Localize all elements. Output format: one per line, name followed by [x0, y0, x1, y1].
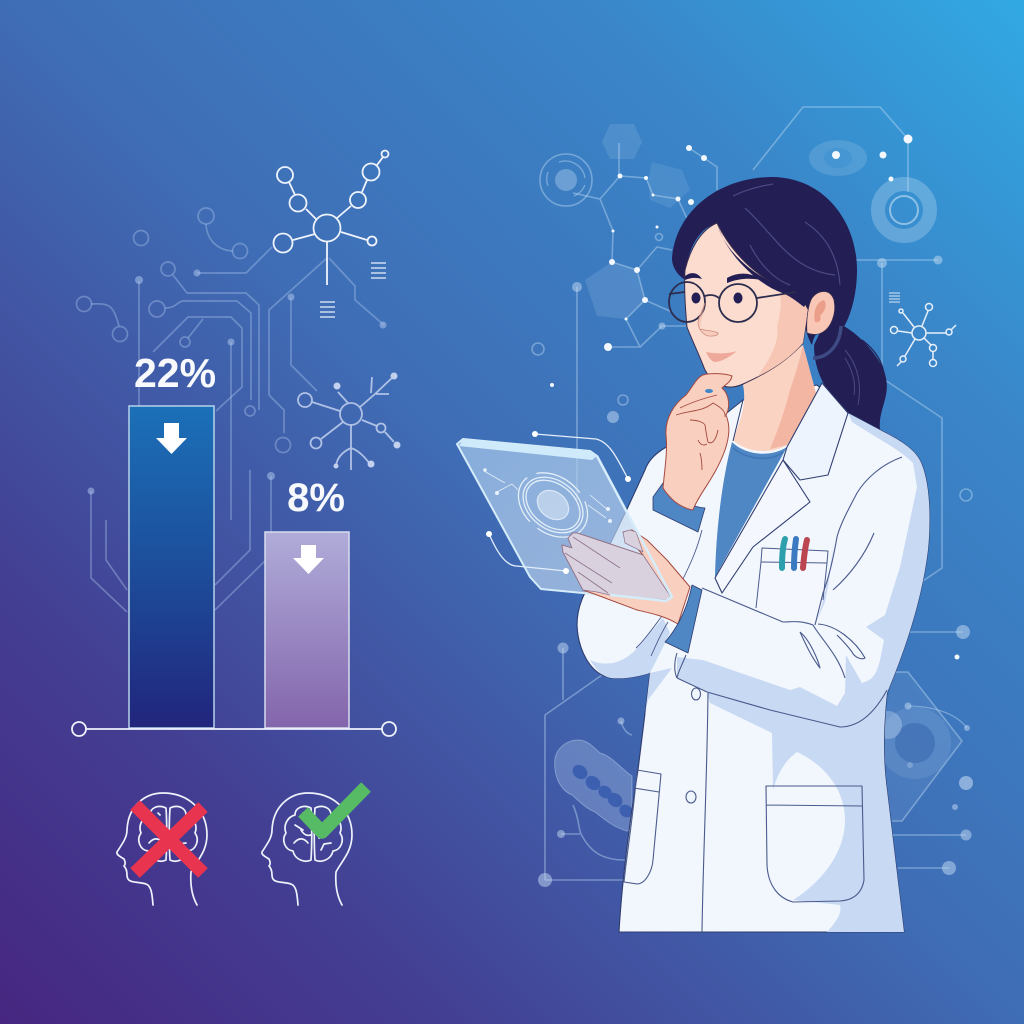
coat buttons	[686, 688, 700, 803]
left lower pocket	[624, 770, 661, 884]
icon: brain with green check	[262, 787, 366, 905]
eye left	[692, 292, 700, 304]
hand behind glass	[562, 533, 671, 600]
ponytail	[814, 320, 887, 430]
faded molecule bottom left	[555, 740, 635, 831]
right lower pocket	[766, 786, 864, 902]
mouth	[706, 351, 737, 362]
lower hand	[562, 530, 690, 624]
icon: brain with red cross	[117, 793, 207, 905]
icon: list lines upper	[371, 263, 386, 278]
coat center line and seams	[675, 457, 902, 932]
face	[685, 223, 808, 387]
callout lines with dots	[486, 431, 631, 574]
right node dots	[550, 134, 960, 660]
ear	[807, 292, 835, 334]
target ring top right	[809, 140, 930, 236]
shade on sleeve	[677, 463, 930, 727]
collar band	[733, 448, 783, 458]
raised hand	[663, 374, 732, 510]
icon: small list right	[889, 293, 900, 302]
label: 8%: 8%	[287, 476, 345, 520]
raised hand fingers	[676, 395, 725, 470]
nose	[698, 303, 718, 336]
lower sleeve cuff	[665, 585, 702, 653]
axis line	[72, 722, 396, 736]
faded cell bottom right	[874, 672, 973, 821]
icon: small network right	[890, 304, 956, 366]
raised sleeve cuff	[653, 483, 705, 532]
shade left body	[645, 668, 672, 715]
target ring left	[540, 154, 592, 206]
shade beside pocket	[815, 520, 836, 625]
chest pocket	[757, 548, 828, 625]
left sleeve creases	[636, 530, 702, 656]
thumb behind glass	[623, 530, 643, 552]
icon: list lines lower	[320, 302, 335, 317]
tablet nodes	[483, 468, 612, 523]
network icon: lower	[298, 372, 400, 470]
eye right	[734, 292, 742, 304]
coat shading	[590, 413, 930, 932]
hair tie	[813, 326, 841, 358]
tablet	[457, 439, 672, 601]
scientist figure	[457, 177, 930, 932]
hair highlights	[733, 184, 840, 285]
left circuit background lines	[76, 208, 386, 612]
fingerprint display	[484, 460, 608, 550]
shade under arm	[707, 692, 904, 932]
hair lock across forehead	[717, 222, 812, 307]
ponytail highlights	[845, 350, 859, 405]
eyebrows	[685, 273, 762, 283]
neck shadow	[770, 345, 817, 449]
shade left sleeve	[590, 618, 670, 678]
chest pocket lines	[756, 548, 828, 608]
icon: down arrow on second bar	[293, 545, 324, 574]
lab coat body	[577, 385, 930, 932]
bar: 8%	[265, 532, 349, 728]
cheek shade	[757, 291, 808, 377]
bar chart	[72, 350, 396, 736]
neck	[733, 345, 817, 451]
hair back	[672, 177, 857, 345]
left collar edge	[733, 400, 743, 441]
gap between fingers	[705, 389, 713, 393]
label: 22%: 22%	[134, 350, 216, 396]
glasses	[669, 282, 796, 322]
network icon: upper	[274, 150, 388, 285]
upper collar	[783, 383, 848, 480]
finger lines	[565, 537, 620, 593]
right background science network	[532, 107, 972, 880]
ear inner	[814, 300, 826, 322]
right faded dots	[538, 256, 973, 887]
icon: down arrow on first bar	[156, 423, 187, 454]
ponytail outline	[862, 340, 885, 395]
tablet right edge	[597, 456, 672, 601]
pens	[782, 539, 807, 568]
blue shirt	[715, 442, 787, 577]
bar: 22%	[129, 406, 214, 728]
lower lapel	[715, 460, 810, 593]
shade shoulder	[848, 413, 922, 465]
